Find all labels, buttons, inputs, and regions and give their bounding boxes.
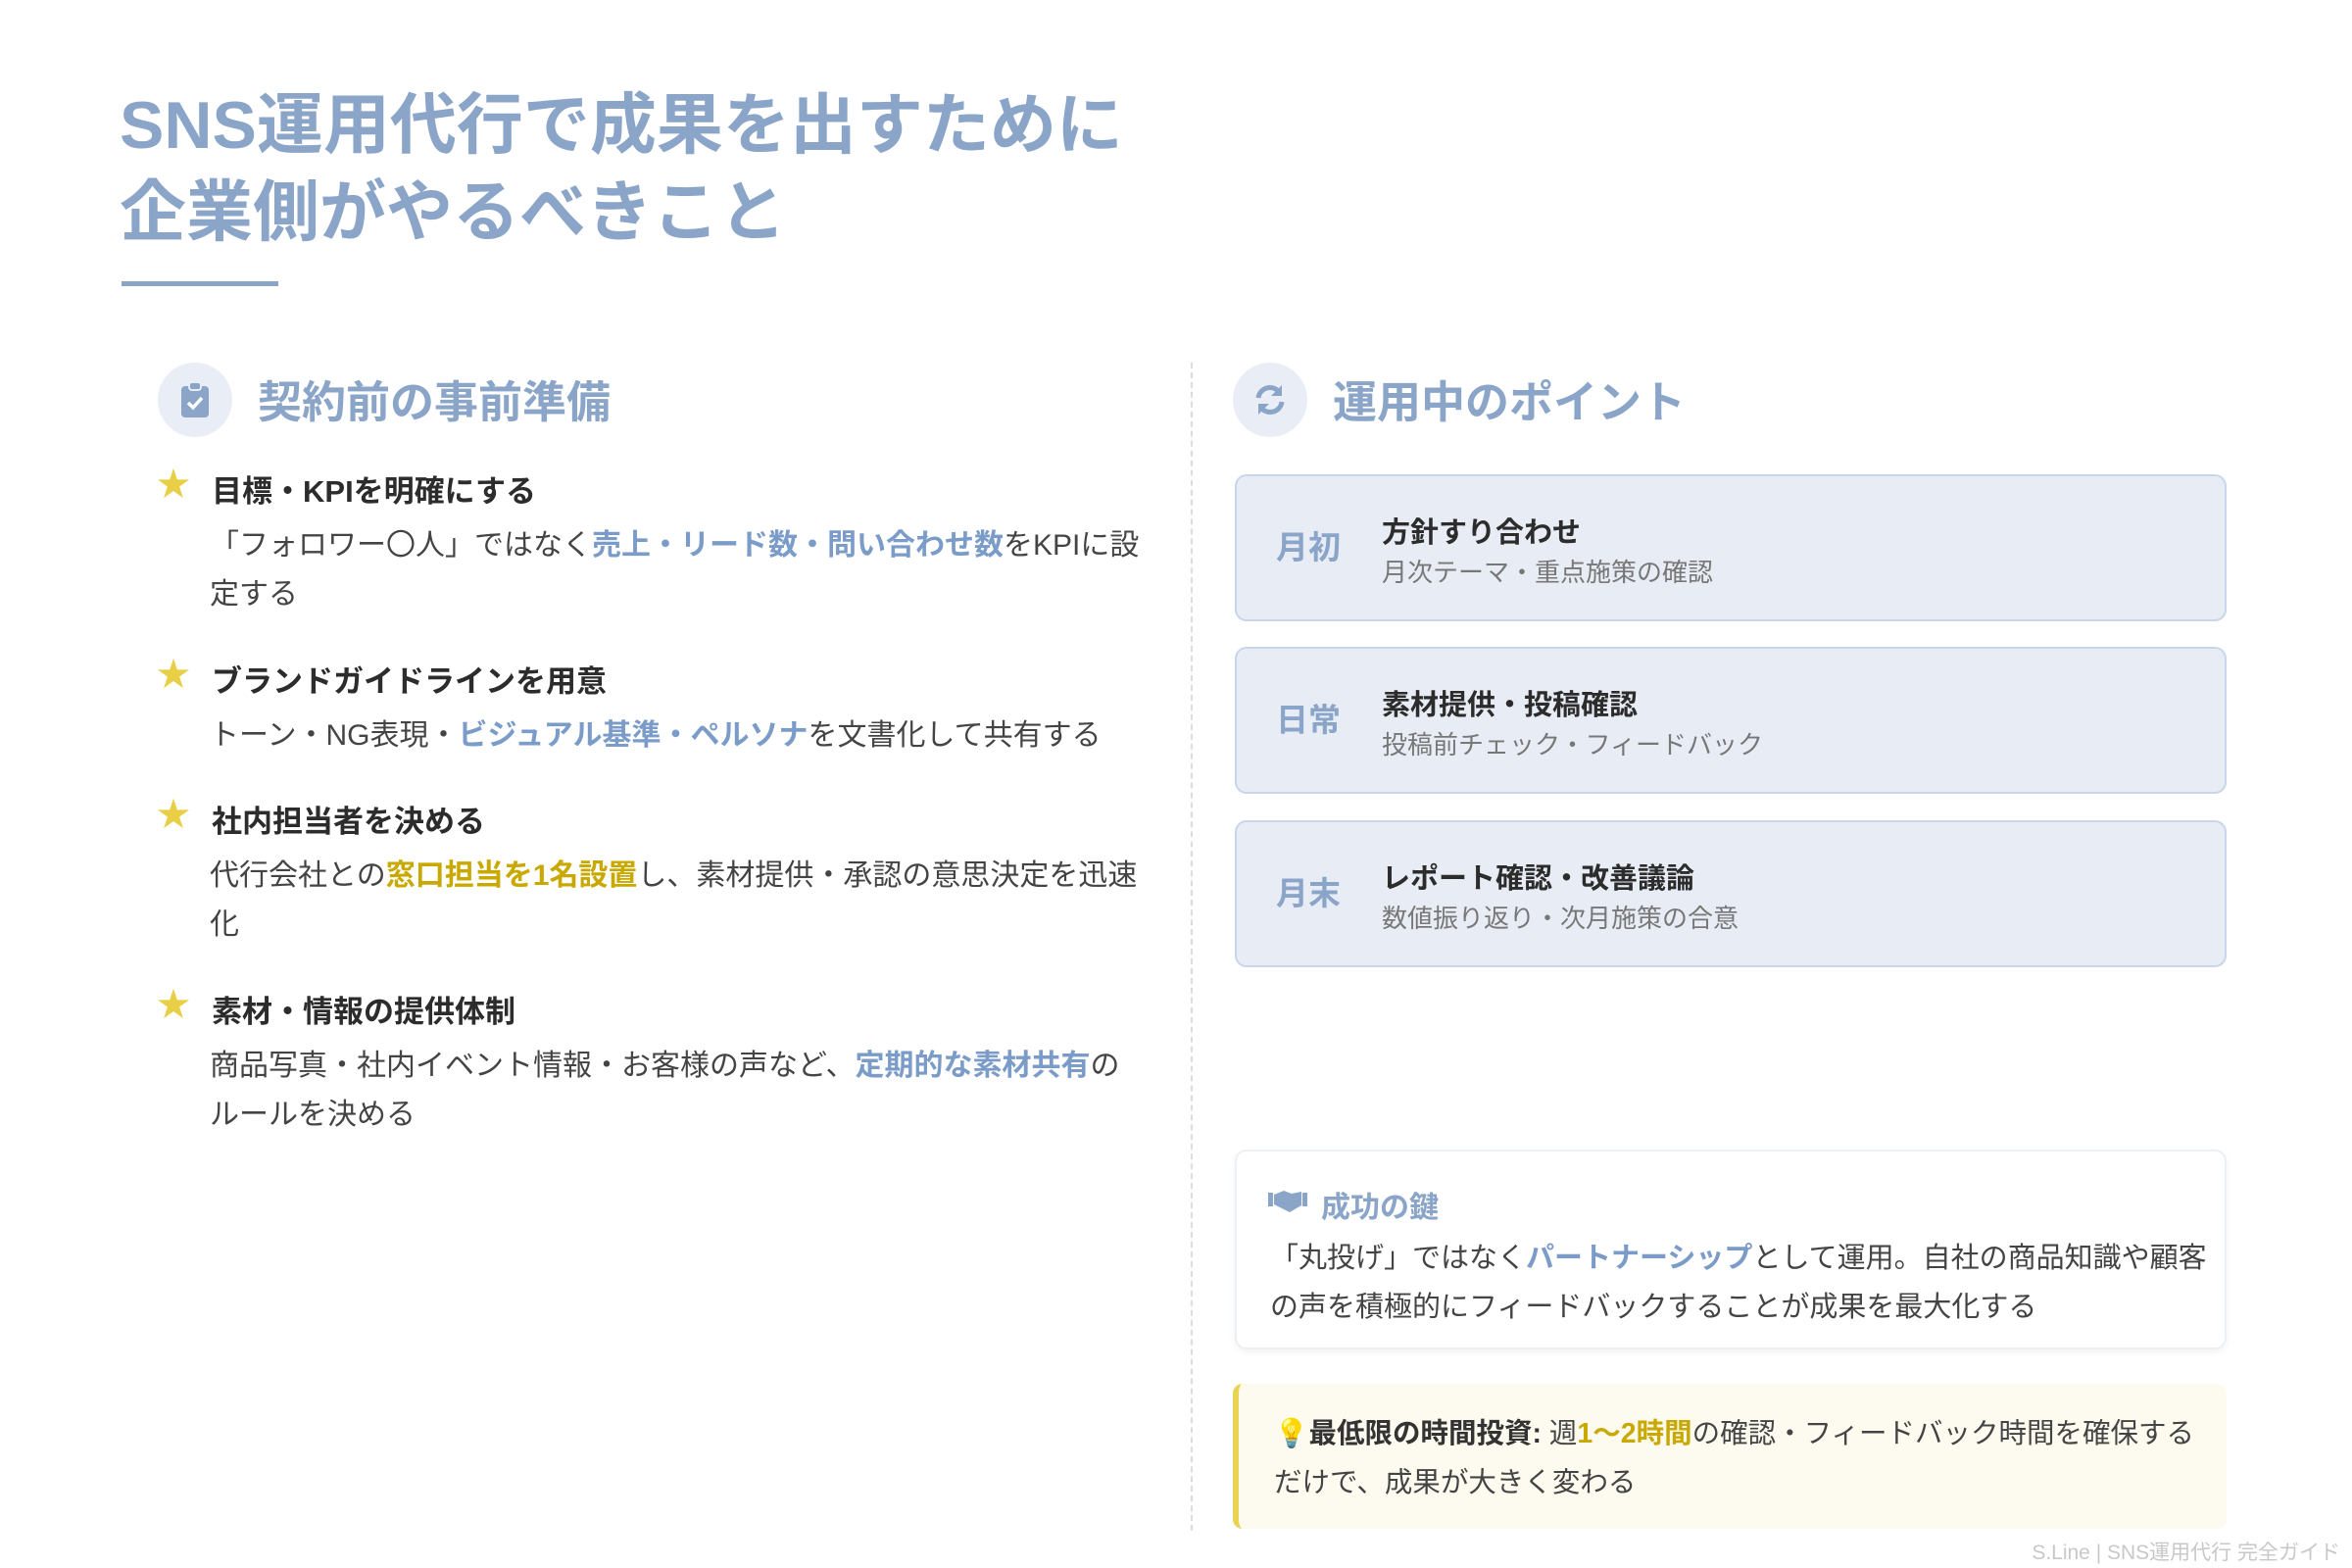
item 1: ★ [157,466,190,504]
item 3: 化 [210,908,239,941]
divider [1191,363,1193,1531]
item 4: 素材・情報の提供体制 [212,995,515,1029]
card: 月初 [1235,474,2227,621]
item 4: ルールを決める [210,1099,416,1131]
card: 日常: 素材提供・投稿確認 [1382,690,1638,721]
card: 月末: 数値振り返り・次月施策の合意 [1382,904,1739,933]
title: SNS運用代行で成果を出すために [120,88,1123,163]
callout: 最低限の時間投資: 💡最低限の時間投資: 週1〜2時間の確認・フィードバック時間を確保する [1274,1418,2194,1449]
item 2: トーン・NG表現・ビジュアル基準・ペルソナを文書化して共有する [210,719,1102,752]
card: 月初: 月次テーマ・重点施策の確認 [1382,558,1713,587]
heading: 運用中のポイント: 運用中のポイント [1333,377,1686,427]
item 1 [157,466,1139,611]
item 1: 定する [210,578,298,611]
item 1: 「フォロワー〇人」ではなく売上・リード数・問い合わせ数をKPIに設 [210,529,1139,562]
item 3: ★ [157,797,190,834]
card: 月末: レポート確認・改善議論 [1382,863,1694,895]
item 2 [157,657,1102,752]
title underline [122,281,278,286]
card: 月末 [1235,820,2227,967]
card: 日常: 投稿前チェック・フィードバック [1382,730,1763,760]
item 4 [157,987,1119,1131]
item 3: 代行会社との窓口担当を1名設置し、素材提供・承認の意思決定を迅速 [210,859,1137,892]
heading: 契約前の事前準備: 契約前の事前準備 [258,377,611,427]
callout: 成功の鍵: 成功の鍵 [1321,1192,1439,1224]
card: 日常 [1235,647,2227,794]
card: 月初: 方針すり合わせ [1382,517,1581,549]
callout: 最低限の時間投資 [1233,1384,2227,1529]
title: 企業側がやるべきこと [120,175,786,250]
icon: clipboard [158,363,232,437]
icon: handshake [1268,1191,1307,1212]
card: 月初: 月初 [1276,529,1341,565]
card: 日常: 日常 [1276,702,1341,738]
footer: S.Line | SNS運用代行 完全ガイド [2032,1542,2340,1564]
item 2: ★ [157,657,190,694]
item 4: 商品写真・社内イベント情報・お客様の声など、定期的な素材共有の [210,1050,1119,1082]
title [120,88,1123,250]
item 3 [157,797,1137,941]
callout: 成功の鍵 [1235,1150,2227,1349]
icon: sync [1233,363,1307,437]
item 4: ★ [157,987,190,1024]
item 1: 目標・KPIを明確にする [212,474,536,509]
callout: 成功の鍵: 「丸投げ」ではなくパートナーシップとして運用。自社の商品知識や顧客 [1270,1243,2207,1274]
item 2: ブランドガイドラインを用意 [212,664,607,699]
item 3: 社内担当者を決める [212,805,485,839]
callout: 成功の鍵: の声を積極的にフィードバックすることが成果を最大化する [1270,1292,2036,1323]
callout: 最低限の時間投資: だけで、成果が大きく変わる [1274,1467,1636,1498]
card: 月末: 月末 [1276,875,1341,911]
